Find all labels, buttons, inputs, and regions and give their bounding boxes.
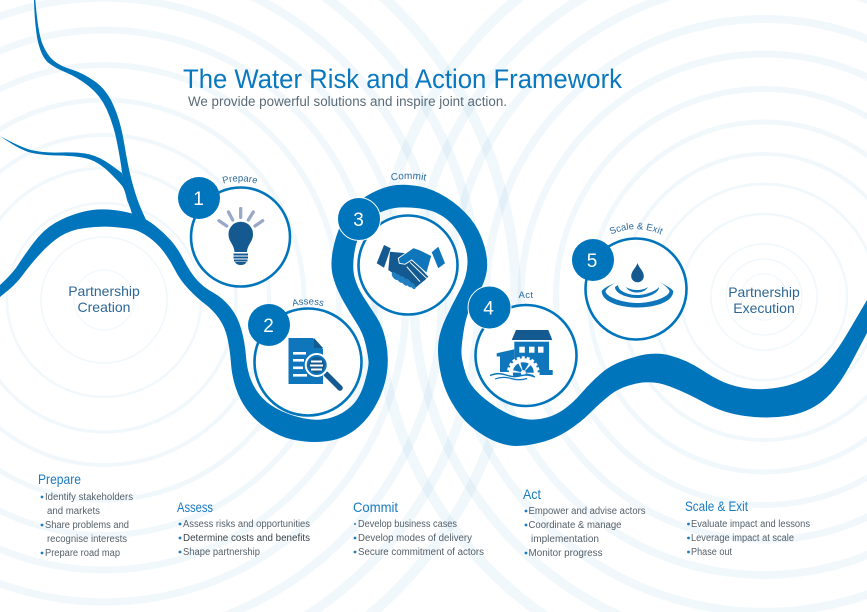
text block: prepare: Share problems and bbox=[45, 520, 129, 531]
badge: 5: 5 bbox=[587, 251, 597, 272]
text block: act: Coordinate & manage bbox=[528, 520, 622, 531]
badge: 3 bbox=[338, 198, 380, 240]
text block: scale and exit: Scale & Exit bbox=[685, 498, 748, 514]
label: commit: Commit bbox=[391, 172, 426, 181]
step 2: assess bbox=[248, 299, 363, 417]
partnership execution label bbox=[728, 284, 800, 316]
step 5: scale and exit bbox=[572, 222, 688, 341]
text block: commit: Commit bbox=[353, 499, 398, 515]
text block: scale and exit: Phase out bbox=[691, 547, 732, 558]
text block: prepare: Prepare bbox=[38, 471, 81, 487]
text block: assess: Assess risks and opportunities bbox=[183, 519, 310, 530]
text block: assess: Shape partnership bbox=[183, 547, 260, 558]
step 4: act bbox=[468, 286, 576, 406]
river: upper tributary bbox=[34, 0, 147, 222]
icon: water mill bbox=[489, 330, 553, 388]
text block: commit: Secure commitment of actors bbox=[358, 547, 484, 558]
icon: water drop with ripples bbox=[602, 263, 673, 308]
badge: 4: 4 bbox=[483, 298, 494, 320]
icon: light bulb bbox=[219, 208, 263, 265]
text block: act: Act bbox=[523, 486, 541, 502]
badge: 1: 1 bbox=[193, 189, 204, 210]
text block: prepare: and markets bbox=[47, 506, 100, 517]
text block: act: implementation bbox=[531, 534, 599, 545]
text block: prepare: recognise interests bbox=[47, 534, 127, 545]
partnership creation label: Creation bbox=[78, 299, 130, 315]
text block: scale and exit bbox=[685, 498, 810, 558]
label: assess: Assess bbox=[292, 299, 324, 306]
text block: act: Monitor progress bbox=[528, 548, 602, 559]
label: prepare: Prepare bbox=[222, 176, 258, 184]
text block: commit: Develop modes of delivery bbox=[358, 533, 472, 544]
partnership creation label: Partnership bbox=[68, 283, 140, 299]
text block: act: Empower and advise actors bbox=[528, 506, 646, 517]
badge: 3: 3 bbox=[353, 210, 364, 231]
text block: prepare bbox=[38, 471, 133, 559]
text block: assess: Determine costs and benefits bbox=[183, 533, 310, 544]
text block: commit: Develop business cases bbox=[358, 519, 457, 530]
icon: document with magnifier bbox=[288, 338, 340, 388]
step 1: prepare bbox=[178, 176, 292, 288]
partnership execution label: Partnership bbox=[728, 284, 800, 300]
text block: assess: Assess bbox=[177, 499, 213, 515]
text block: act bbox=[523, 486, 646, 559]
partnership creation label bbox=[68, 283, 140, 315]
step 3: commit bbox=[338, 172, 459, 316]
subtitle: We provide powerful solutions and inspire joint action. bbox=[188, 94, 507, 109]
text block: prepare: Identify stakeholders bbox=[45, 492, 133, 503]
text block: assess bbox=[177, 499, 310, 558]
text block: commit bbox=[353, 499, 484, 558]
text block: scale and exit: Leverage impact at scale bbox=[691, 533, 794, 544]
title: The Water Risk and Action Framework bbox=[183, 64, 622, 94]
icon: handshake bbox=[377, 245, 445, 290]
label: scale and exit: Scale & Exit bbox=[610, 222, 663, 234]
badge: 2: 2 bbox=[263, 316, 274, 337]
river: main stream bbox=[0, 185, 867, 446]
text block: prepare: Prepare road map bbox=[45, 548, 120, 559]
text block: scale and exit: Evaluate impact and lessons bbox=[691, 519, 810, 530]
label: act: Act bbox=[518, 290, 533, 301]
partnership execution label: Execution bbox=[733, 300, 795, 316]
river: lower tributary bbox=[0, 136, 133, 215]
